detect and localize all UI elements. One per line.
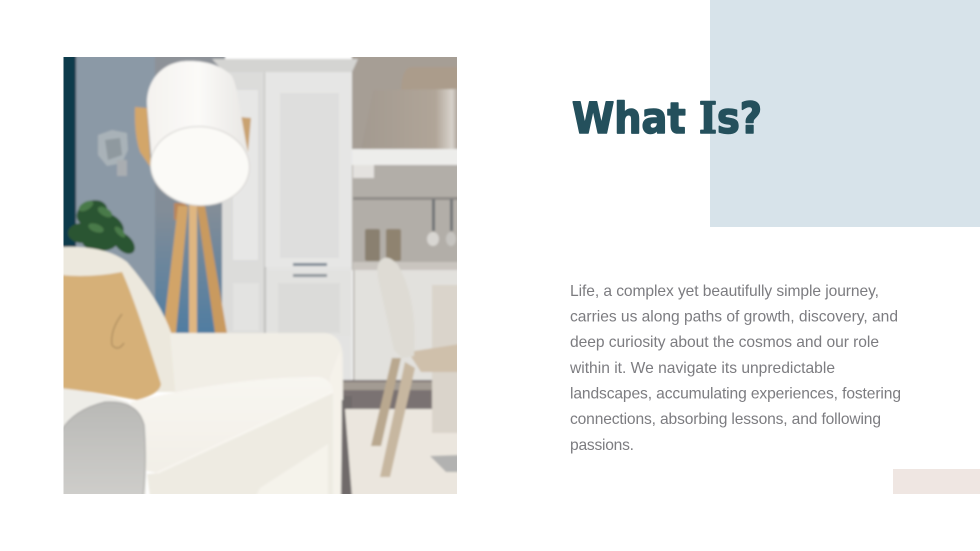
text block: description paragraph: passions. [570, 437, 634, 454]
photo: living room and kitchen interior [60, 54, 460, 498]
text block: description paragraph: landscapes, accumulating experiences, fostering [570, 386, 901, 402]
kitchen back wall [352, 54, 460, 270]
front sofa arm [60, 389, 146, 498]
monogrammed mustard pillow [60, 272, 161, 400]
panel: beige accent block [893, 469, 980, 494]
text block: description paragraph: carries us along paths of growth, discovery, and [570, 308, 898, 326]
dining chair [371, 258, 460, 477]
lower kitchen cabinets and counter [353, 262, 460, 433]
kitchen shelf [352, 149, 460, 178]
text block: description paragraph [569, 283, 901, 454]
range hood [402, 68, 457, 150]
text block: description paragraph: within it. We navigate its unpredictable [569, 360, 835, 377]
floor and rug [338, 380, 460, 497]
text block: description paragraph: Life, a complex yet beautifully simple journey, [570, 283, 879, 300]
utensil rail, jars and ladles [353, 197, 460, 261]
plant [66, 199, 136, 255]
wall sconce [98, 130, 128, 176]
lamp shade [147, 61, 252, 209]
text block: description paragraph: connections, absorbing lessons, and following [570, 411, 881, 428]
wall and window edge [60, 54, 225, 354]
text block: description paragraph: deep curiosity about the cosmos and our role [570, 334, 879, 351]
sofa seat cushion [130, 377, 333, 498]
sofa back and right arm [60, 247, 343, 498]
wooden tripod floor lamp [135, 107, 251, 334]
panel: pale blue background block [710, 0, 980, 227]
white tall cabinet [212, 59, 358, 382]
title: What Is? [572, 94, 762, 144]
